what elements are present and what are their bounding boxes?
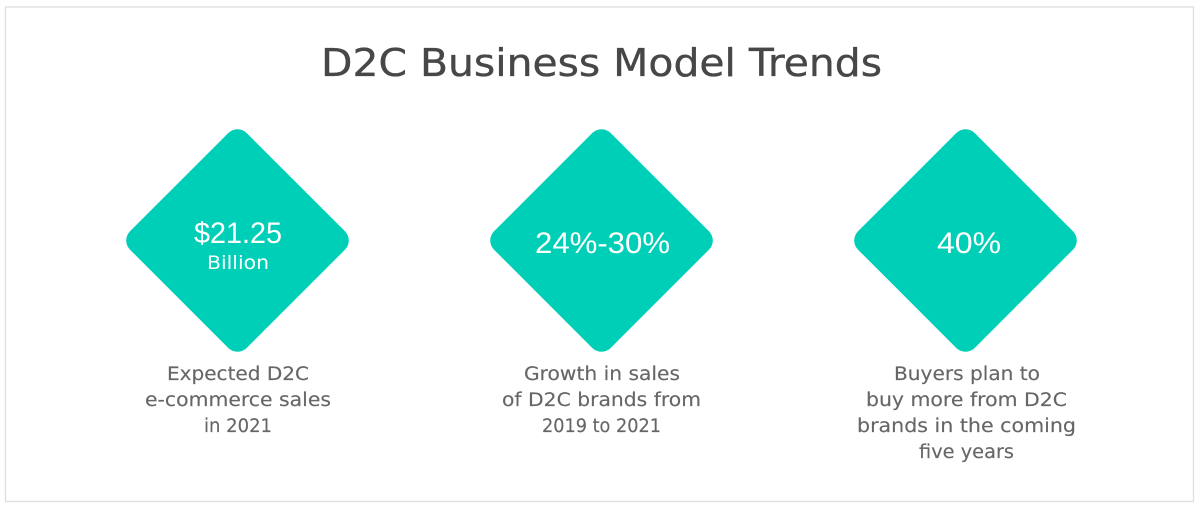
caption: buyers plan: brands in the coming — [857, 416, 1076, 437]
caption: growth in sales: Growth in sales — [524, 364, 680, 385]
caption: buyers plan — [857, 364, 1076, 463]
caption: expected sales: Expected D2C — [167, 364, 309, 385]
panel: buyer intent stat — [849, 124, 1082, 463]
icon: diamond 3 — [849, 124, 1082, 357]
stat value: 40%: 40% — [937, 227, 1001, 260]
stat unit: Billion: Billion — [207, 252, 269, 274]
caption: expected sales: in 2021 — [204, 416, 272, 437]
icon: diamond 2 — [485, 124, 718, 357]
caption: buyers plan: Buyers plan to — [894, 364, 1040, 385]
caption: growth in sales — [502, 364, 701, 437]
caption: growth in sales: 2019 to 2021 — [542, 416, 661, 437]
panel: sales growth stat — [485, 124, 718, 437]
caption: expected sales: e-commerce sales — [145, 390, 331, 411]
caption: expected sales — [145, 364, 331, 437]
stat value: $21.25: $21.25 — [194, 217, 282, 250]
stat value: 24%-30%: 24%-30% — [535, 227, 670, 260]
panel: e-commerce sales stat — [121, 124, 354, 437]
caption: buyers plan: five years — [919, 442, 1014, 463]
title: D2C Business Model Trends — [321, 41, 882, 85]
caption: growth in sales: of D2C brands from — [502, 390, 701, 411]
icon: diamond 1 — [121, 124, 354, 357]
caption: buyers plan: buy more from D2C — [866, 390, 1067, 411]
